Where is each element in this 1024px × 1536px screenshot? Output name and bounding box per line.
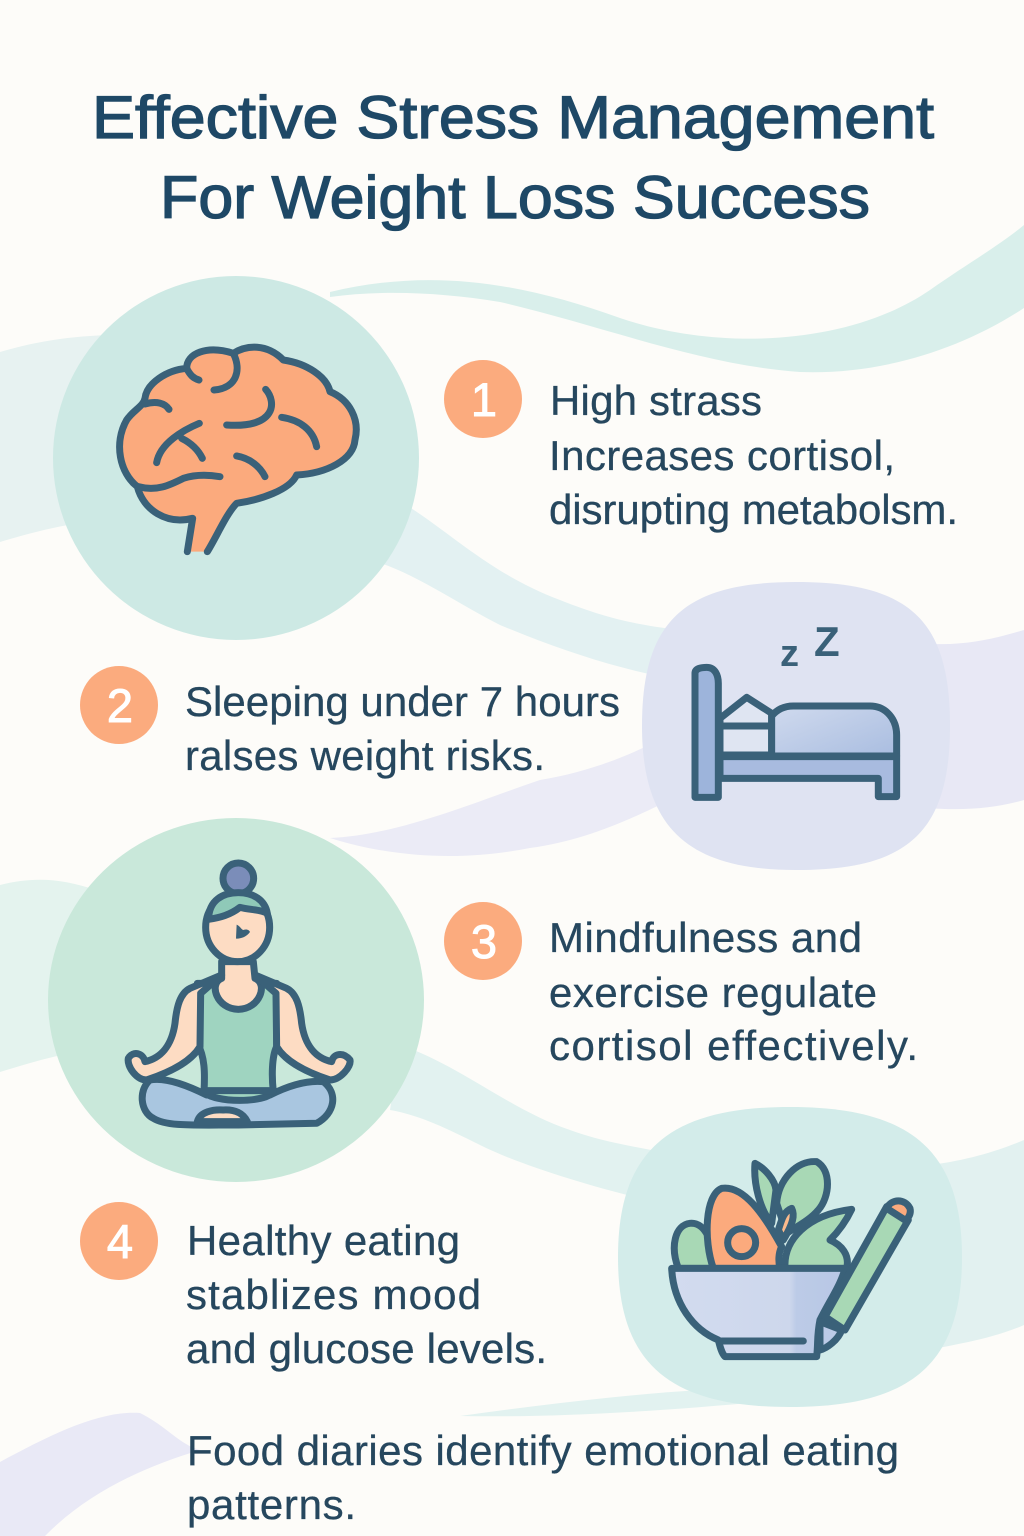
text: food diaries note: patterns. (187, 1481, 356, 1528)
text: high stress: disrupting metabolsm. (549, 486, 958, 533)
text: sleep: Sleeping under 7 hours (185, 678, 620, 725)
icon backdrop: lavender squircle (642, 582, 950, 870)
icon: bed (695, 667, 897, 797)
text: healthy eating: Healthy eating (187, 1217, 460, 1264)
panel: sleep (80, 582, 950, 870)
icon: salad bowl and pencil (672, 1162, 910, 1357)
text: mindfulness: exercise regulate (549, 969, 877, 1016)
text: healthy eating: stablizes mood (186, 1271, 481, 1318)
icon backdrop: teal circle (53, 276, 419, 640)
text: high stress (549, 377, 958, 533)
icon: z z (780, 618, 840, 675)
badge: 4 (80, 1202, 158, 1280)
badge: 3 (444, 902, 522, 980)
title: Effective Stress Management (92, 84, 934, 151)
text: high stress: High strass (550, 377, 762, 424)
text: food diaries note (187, 1427, 899, 1528)
icon: meditating person (128, 863, 350, 1125)
text: high stress: Increases cortisol, (549, 432, 895, 479)
text: sleep (185, 678, 620, 779)
title (92, 84, 934, 231)
icon: brain (120, 347, 356, 552)
text: mindfulness: cortisol effectively. (549, 1022, 918, 1069)
text: mindfulness (549, 914, 918, 1069)
icon: z z: Z (814, 618, 840, 665)
badge: 2: 2 (107, 679, 133, 732)
text: mindfulness: Mindfulness and (549, 914, 862, 961)
panel: healthy eating (80, 1107, 962, 1407)
text: food diaries note: Food diaries identify emotional eating (187, 1427, 899, 1474)
badge: 2 (80, 666, 158, 744)
badge: 4: 4 (107, 1215, 133, 1268)
icon backdrop: teal squircle (618, 1107, 962, 1407)
text: healthy eating: and glucose levels. (186, 1325, 547, 1372)
badge: 1: 1 (471, 373, 497, 426)
panel: mindfulness (48, 818, 918, 1182)
panel: high stress (53, 276, 958, 640)
text: healthy eating (186, 1217, 547, 1372)
icon backdrop: green circle (48, 818, 424, 1182)
badge: 3: 3 (471, 915, 497, 968)
icon: z z: z (780, 633, 799, 675)
title: For Weight Loss Success (160, 164, 870, 231)
text: sleep: ralses weight risks. (185, 732, 545, 779)
badge: 1 (444, 360, 522, 438)
